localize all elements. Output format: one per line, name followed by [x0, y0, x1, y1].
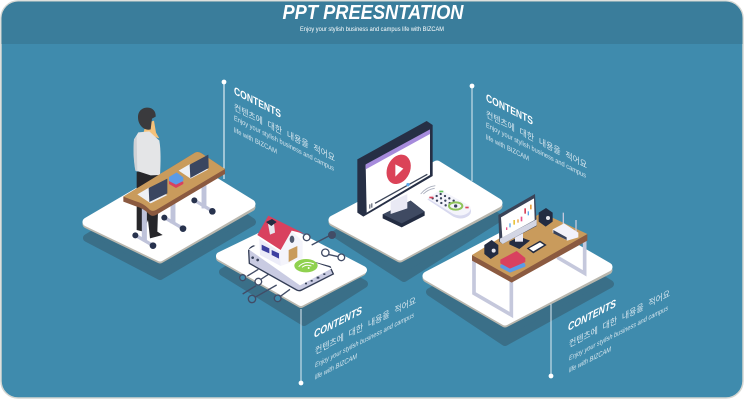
desk feet — [132, 197, 216, 249]
house — [257, 216, 305, 266]
text block: contents bottom centre: Enjoy your stylish business and campus — [315, 310, 414, 369]
text block: contents bottom centre — [314, 276, 416, 382]
wifi badge — [294, 259, 318, 272]
text block: contents top right: 컨텐츠에 대한 내용을 적어요 — [486, 109, 587, 171]
connector line and dot — [299, 309, 303, 385]
connector line and dot — [470, 84, 474, 181]
circuit lines and nodes — [240, 232, 345, 303]
illustration: desk with monitor — [472, 194, 587, 315]
text block: contents top left — [234, 85, 335, 185]
books — [169, 172, 183, 188]
text block: contents top right — [486, 92, 587, 192]
text block: contents bottom right: 컨텐츠에 대한 내용을 적어요 — [569, 287, 670, 350]
text block: contents top left: CONTENTS — [234, 85, 281, 121]
text block: contents bottom right — [568, 269, 670, 375]
wifi router — [553, 213, 578, 241]
router board — [249, 243, 333, 291]
screen title bar — [366, 129, 430, 169]
panel: platform shadows — [87, 176, 610, 342]
illustration: standing person and desk — [123, 108, 225, 249]
text block: contents top left: 컨텐츠에 대한 내용을 적어요 — [234, 102, 335, 164]
speakers — [484, 208, 553, 259]
phone — [527, 241, 547, 253]
text block: contents bottom centre: CONTENTS — [314, 304, 362, 341]
text block: contents top left: life with BIZCAM — [234, 125, 277, 156]
laptops — [137, 155, 209, 203]
play button — [382, 151, 415, 188]
text block: contents top right: Enjoy your stylish business and campus — [486, 120, 586, 180]
text block: contents bottom right: Enjoy your stylish business and campus — [569, 303, 668, 362]
progress bar — [369, 174, 427, 209]
panel: person at desk platform — [87, 80, 251, 259]
monitor frame — [357, 121, 433, 217]
text block: contents top right: CONTENTS — [486, 92, 533, 128]
desk top — [472, 234, 587, 283]
monitor — [498, 194, 537, 249]
books — [500, 251, 525, 273]
panel: house platform — [220, 216, 363, 385]
panel: monitor platform — [333, 84, 498, 258]
text block: contents bottom centre: life with BIZCAM — [315, 351, 358, 381]
desk top — [123, 152, 225, 216]
text block: contents top right: life with BIZCAM — [486, 132, 529, 163]
text block: contents bottom centre: 컨텐츠에 대한 내용을 적어요 — [315, 294, 416, 357]
monitor stand — [383, 194, 425, 227]
wireless waves — [421, 186, 435, 194]
person — [134, 108, 163, 238]
text block: contents top left: Enjoy your stylish business and campus — [234, 113, 334, 173]
subtitle: Enjoy your stylish business and campus life with BIZCAM — [300, 26, 444, 33]
monitor screen — [366, 130, 430, 213]
text block: contents bottom right: CONTENTS — [568, 297, 616, 334]
panel: desk platform — [427, 194, 608, 378]
connector line and dot — [549, 304, 553, 378]
illustration: smart home circuit — [240, 216, 345, 303]
text block: contents bottom right: life with BIZCAM — [569, 344, 612, 374]
illustration: monitor and remote — [357, 121, 471, 227]
title: PPT PREESNTATION — [282, 2, 464, 24]
remote control — [427, 190, 471, 219]
desk legs — [135, 180, 213, 246]
desk legs — [474, 240, 585, 315]
connector line and dot — [222, 80, 226, 179]
